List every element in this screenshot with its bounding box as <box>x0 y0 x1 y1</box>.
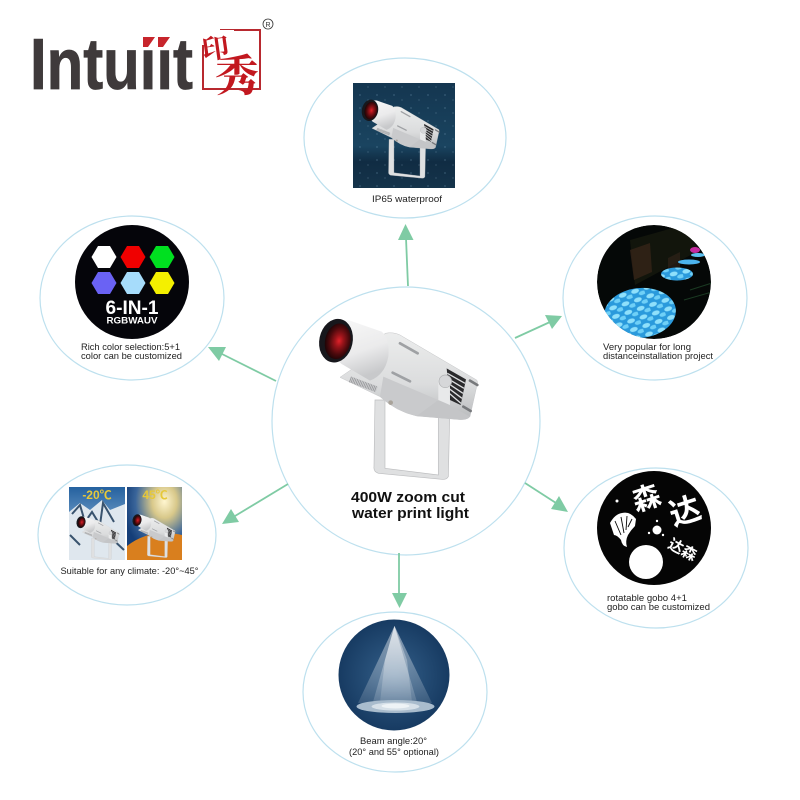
icon: colour hexagons disc <box>75 225 189 339</box>
caption: distanceinstallation project <box>603 351 713 362</box>
caption: Suitable for any climate: -20°~45° <box>60 566 199 577</box>
caption: color can be customized <box>81 351 182 362</box>
panel: central product <box>272 287 540 555</box>
registered mark: R <box>265 22 271 29</box>
photo: blue water print on ground <box>597 225 712 342</box>
icon: gobo disc: 森 <box>628 479 665 517</box>
panel: IP65 waterproof <box>304 58 506 218</box>
photo: hot climate: 45℃ <box>142 488 168 502</box>
heading: product name <box>351 489 469 522</box>
arrow: to waterproof <box>398 224 414 286</box>
caption <box>81 342 182 362</box>
icon: gobo disc: 达森 <box>665 535 700 565</box>
caption: Rich color selection:5+1 <box>81 342 180 353</box>
caption: (20° and 55° optional) <box>349 747 439 758</box>
logo seal: 秀 <box>215 40 259 104</box>
panel: beam angle <box>303 612 487 772</box>
icon: gobo disc: 达 <box>665 490 705 533</box>
panel: 6-in-1 colours <box>40 216 224 380</box>
arrow: to gobo <box>525 483 568 512</box>
arrow: to climate <box>222 484 288 524</box>
caption: rotatable gobo 4+1 <box>607 593 687 604</box>
panel: gobo <box>564 468 748 628</box>
heading: product name: 400W zoom cut <box>351 489 465 506</box>
icon: colour hexagons disc: 6-IN-1 <box>106 298 159 319</box>
caption <box>349 736 439 758</box>
caption: IP65 waterproof <box>372 194 442 205</box>
icon: colour hexagons disc: RGBWAUV <box>106 316 158 326</box>
icon: gobo disc <box>597 471 711 585</box>
registered mark <box>263 19 273 29</box>
photo: projector in rain <box>353 83 455 188</box>
logo seal <box>199 25 260 104</box>
logo seal: 印 <box>199 25 231 68</box>
caption: Beam angle:20° <box>360 736 427 747</box>
icon: beam disc <box>338 620 450 730</box>
photo: cold climate: -20℃ <box>82 488 112 502</box>
caption: gobo can be customized <box>607 602 710 613</box>
caption: Very popular for long <box>603 342 691 353</box>
logo <box>30 19 273 105</box>
photo: cold climate <box>69 487 125 560</box>
photo: hot climate <box>127 487 182 560</box>
panel: long distance installation <box>563 216 747 380</box>
arrow: to colours <box>208 347 276 381</box>
caption <box>603 342 713 362</box>
caption <box>607 593 710 613</box>
arrow: to beam angle <box>392 553 407 608</box>
heading: product name: water print light <box>351 505 469 522</box>
panel: climate <box>38 465 216 605</box>
logo wordmark: Intuiit <box>30 25 193 105</box>
icon: main projector <box>315 316 477 479</box>
arrow: to long distance <box>515 315 562 338</box>
icon: flame <box>610 513 636 547</box>
